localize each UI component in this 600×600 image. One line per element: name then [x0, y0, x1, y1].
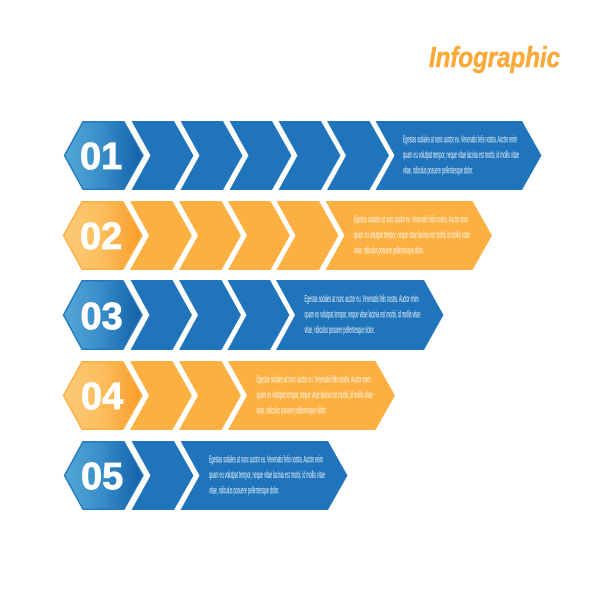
text arrow row 4	[228, 361, 395, 430]
hexagon badge 02: 02	[80, 216, 122, 258]
chevron row 5	[132, 441, 194, 510]
text arrow row 5	[180, 441, 348, 510]
hexagon badge 01: 01	[80, 136, 122, 178]
text arrow row 2	[326, 201, 492, 270]
hexagon badge 05: 05	[81, 456, 123, 498]
text arrow row 2: vitae, ridiculus posuere pellentesque dolor.	[354, 244, 424, 256]
text arrow row 1: vitae, ridiculus posuere pellentesque dolor.	[403, 164, 473, 176]
row 5	[64, 441, 348, 510]
text arrow row 1	[376, 121, 542, 190]
row 2	[64, 201, 492, 270]
text: quam eu volutpat tempor, neque vitae lacinia est morbi, id mollis vitae	[256, 389, 373, 401]
hexagon badge 01	[64, 122, 143, 189]
text: quam eu volutpat tempor, neque vitae lacinia est morbi, id mollis vitae	[209, 469, 325, 481]
chevrons row 4	[130, 361, 241, 430]
hexagon badge 03: 03	[80, 296, 123, 338]
title: Infographic	[429, 42, 560, 74]
row 1	[64, 121, 542, 190]
chevrons row 2	[130, 201, 338, 270]
text arrow row 5: vitae, ridiculus posuere pellentesque dolor.	[209, 484, 279, 496]
text arrow row 3	[276, 280, 444, 350]
hexagon badge 03	[64, 281, 142, 349]
row 4	[64, 361, 395, 430]
text: Egestas sodales at nunc auctor eu. Venenatis felis nostra. Auctor enim	[256, 374, 371, 386]
hexagon badge 05	[64, 442, 143, 509]
chevrons row 3	[130, 280, 290, 350]
row 3	[64, 280, 444, 350]
text: Egestas sodales at nunc auctor eu. Venenatis felis nostra. Auctor enim	[209, 454, 323, 466]
text arrow row 4: vitae, ridiculus posuere pellentesque dolor.	[256, 404, 326, 416]
chevrons row 1	[132, 121, 389, 190]
hexagon badge 04	[64, 362, 142, 429]
text arrow row 3: vitae, ridiculus posuere pellentesque dolor.	[304, 324, 374, 336]
hexagon badge 02	[64, 202, 142, 269]
hexagon badge 04: 04	[81, 376, 123, 418]
